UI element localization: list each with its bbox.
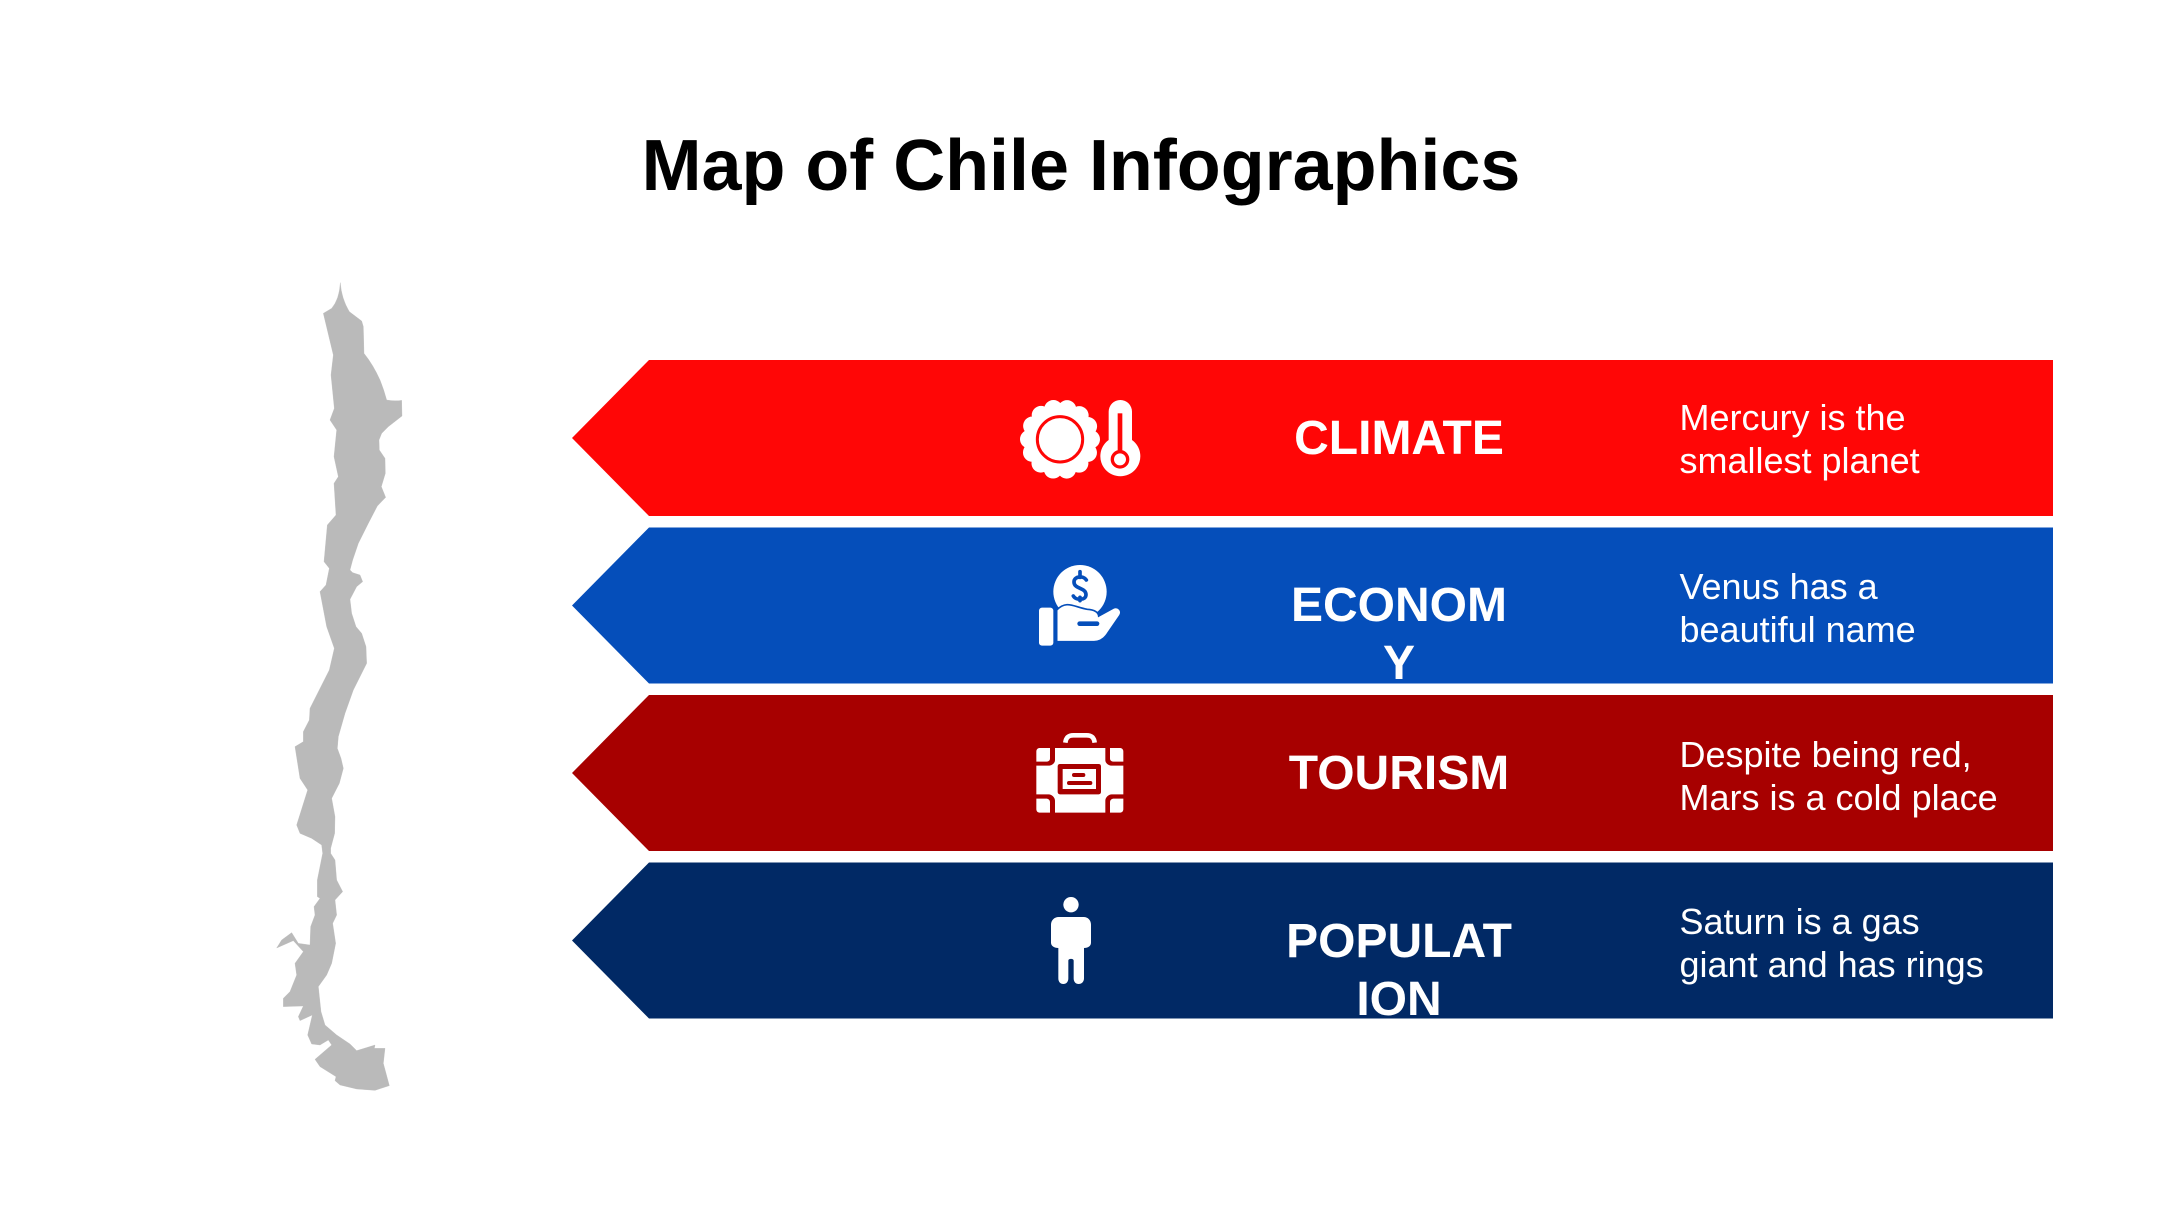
label: population: ION bbox=[1356, 973, 1442, 1026]
icon: sun and thermometer bbox=[1029, 400, 1140, 476]
map of Chile bbox=[277, 283, 402, 1090]
text: population bbox=[1680, 901, 1984, 985]
label: economy: ECONOM bbox=[1291, 579, 1507, 632]
label: tourism: TOURISM bbox=[1289, 747, 1509, 800]
text: tourism bbox=[1680, 734, 1998, 818]
banner: climate bbox=[572, 360, 2053, 516]
icon: person bbox=[1051, 897, 1091, 984]
text: tourism: Mars is a cold place bbox=[1680, 777, 1998, 818]
text: climate: smallest planet bbox=[1680, 440, 1920, 481]
text: tourism: Despite being red, bbox=[1680, 734, 1972, 775]
banner: economy bbox=[572, 528, 2053, 684]
label: population: POPULAT bbox=[1286, 915, 1512, 968]
label: population bbox=[1286, 915, 1512, 1026]
banner: population bbox=[572, 862, 2053, 1018]
label: climate: CLIMATE bbox=[1294, 412, 1504, 465]
text: economy: Venus has a bbox=[1680, 566, 1878, 607]
text: population: giant and has rings bbox=[1680, 944, 1984, 985]
label: economy bbox=[1291, 579, 1507, 690]
icon: suitcase bbox=[1036, 735, 1123, 813]
label: economy: Y bbox=[1383, 637, 1415, 690]
text: economy: beautiful name bbox=[1680, 609, 1916, 650]
banner: tourism bbox=[572, 695, 2053, 851]
title: Map of Chile Infographics bbox=[642, 126, 1520, 206]
text: economy bbox=[1680, 566, 1916, 650]
icon: hand holding coin bbox=[1039, 565, 1121, 646]
text: population: Saturn is a gas bbox=[1680, 901, 1920, 942]
text: climate: Mercury is the bbox=[1680, 397, 1906, 438]
text: climate bbox=[1680, 397, 1920, 481]
